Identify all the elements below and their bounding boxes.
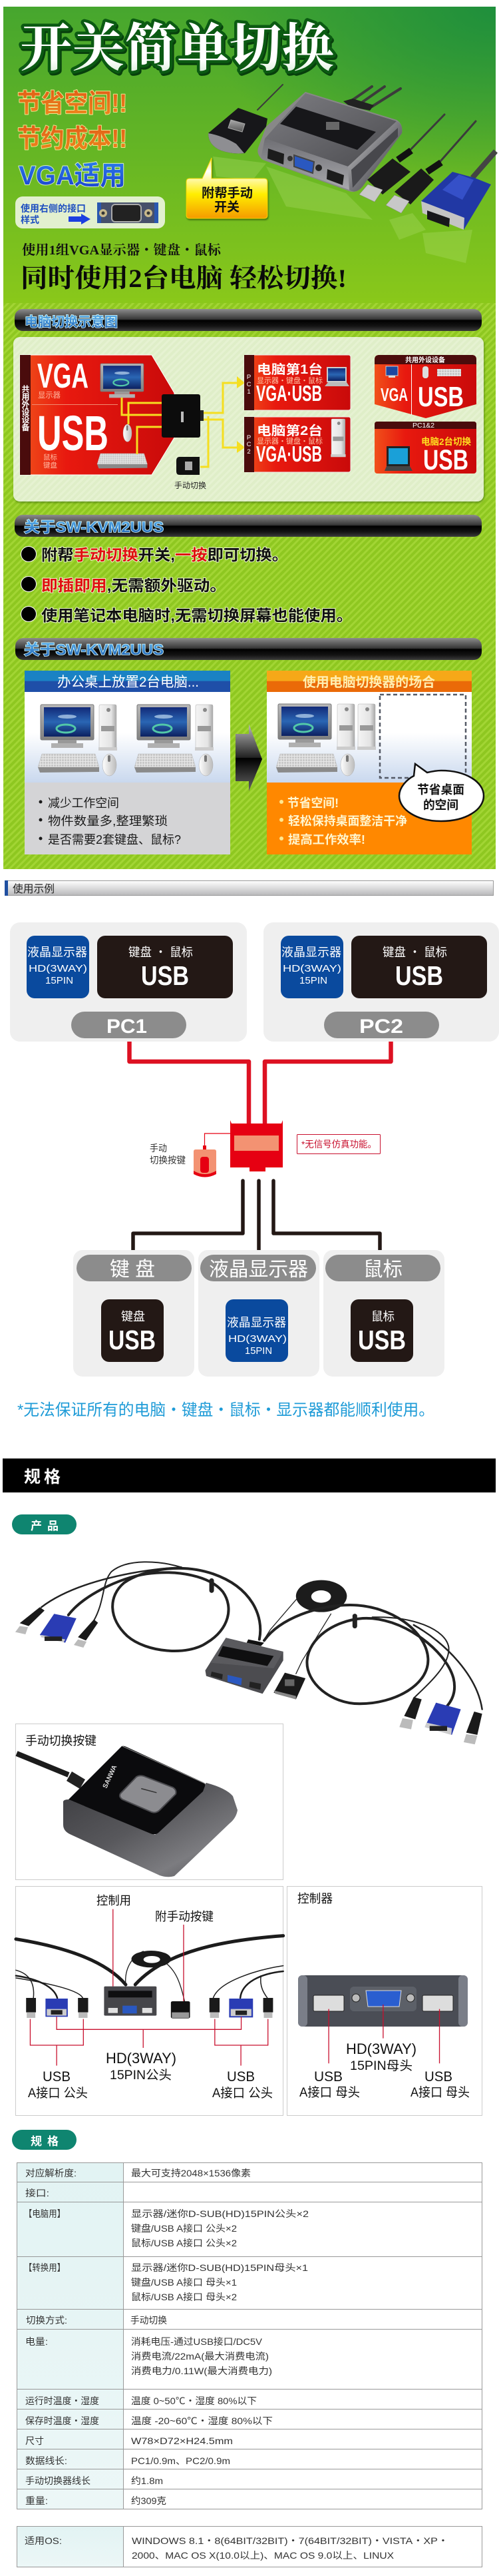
monitor port box — [27, 936, 89, 998]
right plugs — [399, 1697, 482, 1744]
row: switching method: 切换方式: — [26, 2315, 67, 2326]
label: USB female right: A接口 母头 — [411, 2085, 470, 2100]
pill: specifications — [12, 2130, 77, 2150]
cable coil — [296, 1580, 347, 1612]
pill: specifications: 规 格 — [31, 2135, 59, 2148]
monitor port box: HD(3WAY) — [283, 963, 341, 974]
panel: keyboard — [73, 1250, 194, 1377]
label: manual switch key: 切换按键 — [150, 1155, 186, 1165]
shared devices red block: 共用外设设备 — [21, 385, 30, 432]
drawbacks list — [39, 797, 181, 846]
row: PC side: 鼠标/USB A接口 公头×2 — [131, 2238, 237, 2248]
panel: monitor: 15PIN — [245, 1345, 272, 1357]
panel: cable diagram — [16, 1886, 283, 2115]
row: operating conditions: 运行时温度・湿度 — [25, 2396, 99, 2406]
table: supported OS: WINDOWS 8.1・8(64BIT/32BIT)・7(64BIT/32BIT)・VISTA・XP・ — [132, 2535, 448, 2546]
row: PC side: 键盘/USB A接口 公头×2 — [131, 2223, 237, 2234]
note: no signal emulation: *无信号仿真功能。 — [301, 1139, 377, 1149]
callout: manual switch: 开关 — [214, 200, 240, 214]
panel: controller — [287, 1886, 482, 2115]
row: power: 电量: — [25, 2336, 48, 2347]
row: switch side: 鼠标/USB A接口 母头×2 — [131, 2292, 237, 2302]
heading bar: about product 2 — [15, 638, 482, 660]
label: HD — [106, 2050, 176, 2083]
feature 2: 即插即用 ,无需额外驱动。 — [41, 577, 226, 594]
arrow — [236, 724, 262, 791]
heading bar: about product: 关于SW-KVM2UUS — [24, 519, 164, 535]
panel: monitor: HD(3WAY) — [228, 1333, 287, 1345]
PC1 box — [244, 355, 351, 410]
drawbacks list: 是否需要2套键盘、鼠标? — [48, 833, 181, 846]
note text: 使用右侧的接口 — [21, 203, 86, 214]
switch — [206, 1638, 283, 1694]
row: storage conditions: 保存时温度・湿度 — [25, 2415, 99, 2426]
PC1 box: 电脑第1台 — [257, 362, 323, 377]
PC1 box: C — [247, 381, 251, 388]
background: striped green area — [3, 303, 496, 869]
yellow wires — [122, 383, 237, 467]
puck — [273, 1673, 305, 1700]
PC2 box: C — [247, 441, 251, 448]
PC2 box: 显示器・键盘・鼠标 — [257, 436, 323, 446]
keyboard and mouse box — [351, 936, 487, 998]
title: 开关简单切换 — [20, 19, 334, 77]
row: power: 消费电流/22mA(最大消费电流) — [131, 2351, 269, 2362]
product photo: full set — [15, 1562, 482, 1744]
table: specifications — [17, 2162, 482, 2509]
row: interface: 接口: — [25, 2188, 49, 2198]
PC1 box: 显示器・键盘・鼠标 — [257, 376, 323, 385]
rear cables — [257, 85, 476, 166]
label: manual switch key: 手动 — [150, 1143, 167, 1153]
manual button diagram — [194, 1133, 230, 1177]
label: USB right: A接口 公头 — [212, 2086, 273, 2100]
row: power: 消费电力/0.11W(最大消费电力) — [131, 2366, 272, 2376]
row: manual switch cable: 约1.8m — [131, 2475, 163, 2486]
callout: manual switch: 附帮手动 — [202, 186, 253, 200]
label: manual button: 附手动按键 — [155, 1910, 214, 1923]
section heading: usage example: 使用示例 — [13, 883, 55, 895]
shared devices shield: 共用外设设备 — [405, 356, 445, 364]
panel: monitor: 液晶显示器 — [227, 1316, 286, 1329]
benefits list: 节省空间! — [287, 796, 339, 810]
PC2 box: VGA·USB — [256, 442, 322, 466]
dashed free space — [380, 695, 466, 778]
row: cable length: PC1/0.9m、PC2/0.9m — [131, 2455, 230, 2466]
benefits list — [279, 796, 407, 846]
label: USB left: A接口 公头 — [28, 2086, 88, 2100]
slogan: VGA: VGA适用 — [19, 161, 126, 190]
red callout lines — [329, 2005, 440, 2063]
monitor port box: 15PIN — [45, 975, 73, 986]
label: HD female: HD(3WAY) — [346, 2041, 416, 2057]
keyboard and mouse box — [97, 936, 233, 998]
PC2 box: 2 — [247, 448, 251, 456]
shared devices shield — [375, 355, 476, 418]
left plugs — [15, 1607, 98, 1648]
note: no signal emulation — [297, 1135, 381, 1153]
row: operating conditions: 温度 0~50℃・湿度 80%以下 — [131, 2396, 257, 2406]
panel: keyboard: 键盘 — [121, 1310, 145, 1323]
label: manual switch key — [150, 1143, 186, 1165]
table: supported OS — [17, 2526, 482, 2567]
row: PC side — [24, 2208, 309, 2248]
pill: PC1 — [71, 1012, 186, 1038]
keyboard and mouse box: USB — [141, 960, 189, 991]
photo: switch key: SANWA — [102, 1764, 118, 1789]
subtitle: 使用1组VGA显示器・键盘・鼠标 — [22, 242, 222, 258]
panel: monitor: 液晶显示器 — [209, 1259, 308, 1281]
row: manual switch cable: 手动切换器线长 — [25, 2475, 90, 2486]
drawbacks list: 减少工作空间 — [48, 797, 119, 810]
speech bubble: 节省桌面 — [417, 783, 464, 797]
section heading: usage example — [5, 880, 494, 896]
label: HD: HD(3WAY) — [106, 2050, 176, 2067]
table: supported OS: 适用OS: — [25, 2535, 62, 2546]
row: weight: 约309克 — [131, 2495, 166, 2506]
row: power — [25, 2336, 272, 2376]
feature list — [21, 546, 353, 624]
callout: manual switch — [186, 158, 267, 218]
monitor port box — [281, 936, 343, 998]
row: cable length — [25, 2455, 230, 2466]
row: switch side: 显示器/迷你D-SUB(HD)15PIN母头×1 — [131, 2262, 308, 2273]
PC2 box — [244, 417, 351, 472]
arrowheads — [237, 376, 245, 453]
heading bar: switching diagram — [15, 309, 482, 331]
row: size — [25, 2435, 233, 2446]
panel: keyboard: 键 盘 — [110, 1259, 155, 1281]
row: cable length: 数据线长: — [25, 2455, 67, 2466]
row: resolution: 对应解析度: — [25, 2168, 77, 2178]
pill: PC2: PC2 — [359, 1016, 403, 1038]
panel: using the switcher: 使用电脑切换器的场合 — [303, 675, 435, 690]
monitor port box: 15PIN — [299, 975, 327, 986]
benefits list: 轻松保持桌面整洁干净 — [288, 814, 407, 828]
manual button icon — [176, 457, 200, 475]
shared devices red block: 鼠标 — [43, 453, 57, 462]
label: control: 控制用 — [96, 1894, 131, 1907]
label: HD: 15PIN公头 — [110, 2068, 172, 2083]
slogan: save cost: 节约成本!! — [17, 125, 127, 153]
KVM switch diagram block — [230, 1120, 283, 1171]
PC2 box: P — [247, 434, 251, 442]
photo: switch key — [17, 1746, 238, 1877]
label: USB right — [212, 2069, 273, 2100]
shared devices shield: USB — [418, 381, 464, 412]
row: operating conditions — [25, 2396, 257, 2406]
label: USB female left: A接口 母头 — [299, 2085, 360, 2100]
PC2 box: 电脑第2台 — [257, 423, 323, 438]
label: USB left — [28, 2069, 88, 2100]
label: USB female left — [299, 2069, 360, 2100]
PC1&2 box — [375, 422, 476, 476]
row: size: W78×D72×H24.5mm — [131, 2435, 233, 2446]
section banner: specifications: 规 格 — [24, 1468, 61, 1486]
monitor port box: 液晶显示器 — [281, 946, 341, 959]
row: storage conditions — [25, 2415, 273, 2426]
row: storage conditions: 温度 -20~60℃・湿度 80%以下 — [131, 2415, 273, 2426]
heading bar: about product — [15, 515, 482, 537]
icon: VGA port — [97, 202, 158, 223]
panel: keyboard: USB — [108, 1325, 156, 1355]
note text — [21, 203, 86, 225]
row: weight: 重量: — [25, 2495, 48, 2506]
slogan: save space: 节省空间!! — [17, 90, 127, 118]
panel: mouse: USB — [358, 1325, 406, 1355]
speech bubble — [399, 764, 484, 821]
drawbacks list: 物件数量多,整理繁琐 — [48, 814, 168, 828]
label: USB female right: USB — [424, 2069, 452, 2085]
product photo: KVM switch with cables — [208, 85, 496, 263]
PC1&2 box: 电脑2台切换 — [421, 436, 471, 447]
row: PC side: 【电脑用】 — [24, 2208, 65, 2219]
row: size: 尺寸 — [25, 2435, 44, 2446]
panel: PC2 — [263, 922, 499, 1042]
shared devices red block: 键盘 — [43, 461, 57, 470]
label: HD female — [346, 2041, 416, 2073]
section banner: specifications — [3, 1458, 496, 1492]
row: manual switch cable — [25, 2475, 163, 2486]
icon: blue arrow — [69, 214, 90, 224]
label: USB female right — [411, 2069, 470, 2100]
connector note box — [15, 196, 165, 228]
pill: PC2 — [324, 1012, 439, 1038]
speech bubble: 的空间 — [423, 798, 458, 812]
PC1 box: 1 — [247, 388, 251, 396]
switch icon — [162, 394, 204, 438]
row: switching method: 手动切换 — [130, 2315, 167, 2326]
table grid — [17, 2162, 482, 2509]
background: green hero panel — [3, 7, 496, 304]
PC1&2 box: USB — [423, 444, 468, 476]
shared devices shield: VGA — [381, 384, 408, 405]
switch body — [257, 92, 402, 192]
shared devices red block: 显示器 — [38, 391, 61, 400]
panel: mouse: 鼠标 — [363, 1259, 403, 1281]
red wires — [129, 1042, 391, 1124]
row: PC side: 显示器/迷你D-SUB(HD)15PIN公头×2 — [131, 2208, 309, 2219]
keyboard and mouse box: USB — [395, 960, 443, 991]
headline: 同时使用2台电脑 轻松切换! — [21, 264, 347, 293]
panel: manual switch key: 手动切换按键 — [25, 1734, 96, 1748]
shared devices red block — [20, 355, 174, 475]
row: switch side — [24, 2262, 308, 2302]
cables — [41, 1562, 482, 1710]
PC1&2 box: PC1&2 — [413, 422, 434, 430]
panel: using the switcher — [267, 671, 484, 854]
row: resolution — [25, 2168, 251, 2178]
photo: cables and connectors — [16, 1936, 283, 2019]
row: power: 消耗电压-通过USB接口/DC5V — [131, 2336, 263, 2347]
USB plug 1 — [359, 151, 411, 202]
feature 1: 附帮手动切换开关,一按即可切换。 — [41, 546, 288, 563]
PC1 box: P — [247, 374, 251, 381]
compatibility note: *无法保证所有的电脑・键盘・鼠标・显示器都能顺利使用。 — [17, 1401, 434, 1419]
reflections — [213, 157, 472, 263]
computer set — [276, 704, 376, 776]
heading bar: switching diagram: 电脑切换示意图 — [25, 314, 118, 330]
label: USB female left: USB — [314, 2069, 343, 2085]
computer set 1 — [38, 705, 117, 776]
panel: mouse: 鼠标 — [371, 1310, 395, 1323]
panel: two PCs on desk — [25, 671, 230, 854]
manual switch puck — [208, 108, 267, 153]
red callout lines — [30, 1909, 268, 2066]
panel: PC1 — [10, 922, 247, 1042]
benefits list: 提高工作效率! — [288, 832, 365, 846]
USB plug 2 — [386, 162, 441, 213]
pill: PC1: PC1 — [106, 1016, 147, 1038]
panel: manual switch key — [16, 1724, 283, 1879]
shared devices red block: USB — [37, 406, 108, 461]
keyboard and mouse box: 键盘 ・ 鼠标 — [383, 946, 447, 959]
computer set 2 — [134, 705, 214, 776]
row: switching method — [26, 2315, 167, 2326]
label: USB right: USB — [227, 2069, 255, 2085]
VGA plug — [421, 151, 496, 230]
note text: 样式 — [21, 214, 39, 225]
panel: two PCs on desk: 办公桌上放置2台电脑... — [57, 675, 199, 690]
heading bar: about product 2: 关于SW-KVM2UUS — [24, 641, 164, 658]
PC1 box: VGA·USB — [256, 381, 322, 406]
pill: product: 产 品 — [31, 1520, 59, 1532]
table: supported OS: 2000、MAC OS X(10.0以上)、MAC OS 9.0以上、LINUX — [132, 2550, 395, 2561]
photo: controller ports — [298, 1975, 468, 2027]
keyboard and mouse box: 键盘 ・ 鼠标 — [128, 946, 193, 959]
black wires — [133, 1181, 380, 1254]
row: switch side: 键盘/USB A接口 母头×1 — [131, 2277, 237, 2288]
panel: monitor — [198, 1250, 319, 1377]
feature 3: 使用笔记本电脑时,无需切换屏幕也能使用。 — [41, 607, 353, 624]
panel: switching diagram — [13, 337, 484, 501]
row: switch side: 【转换用】 — [24, 2262, 65, 2273]
label: manual: 手动切换 — [174, 481, 206, 490]
row: resolution: 最大可支持2048×1536像素 — [131, 2168, 251, 2178]
monitor port box: 液晶显示器 — [27, 946, 87, 959]
pill: product — [12, 1514, 77, 1534]
panel: mouse — [323, 1250, 444, 1377]
label: controller: 控制器 — [297, 1892, 333, 1905]
monitor port box: HD(3WAY) — [29, 963, 87, 974]
row: weight — [25, 2495, 166, 2506]
label: HD female: 15PIN母头 — [350, 2059, 413, 2073]
shared devices red block: VGA — [37, 357, 88, 396]
label: USB left: USB — [43, 2069, 71, 2085]
